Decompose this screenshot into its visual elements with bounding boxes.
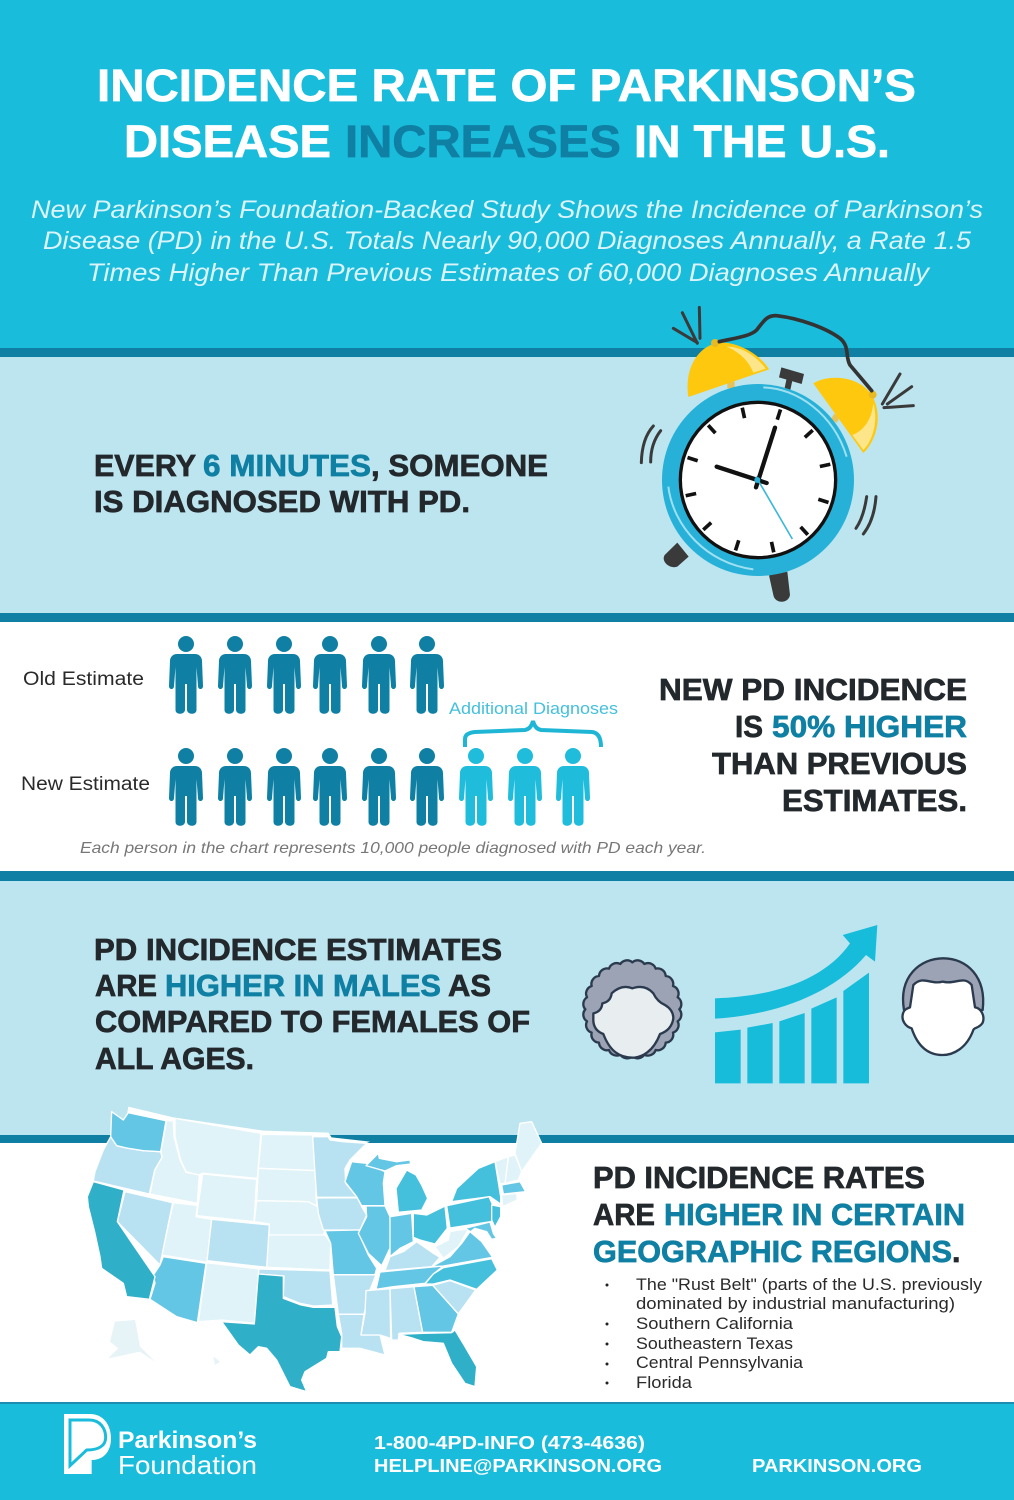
icon: Parkinson's Foundation logo mark — [64, 1414, 111, 1474]
states: light tier — [93, 1137, 476, 1355]
panel: clock section background — [0, 348, 1014, 622]
heading: 50% higher: ESTIMATES. — [782, 784, 967, 818]
panel: header background — [0, 0, 1014, 348]
list: higher-incidence regions — [606, 1276, 983, 1392]
heading: geographic regions: . — [952, 1235, 960, 1269]
states: Alaska and Hawaii — [108, 1320, 220, 1365]
logo wordmark — [118, 1427, 257, 1480]
title: IN THE U.S. — [634, 116, 890, 167]
heading: higher in males: COMPARED TO FEMALES OF — [95, 1005, 530, 1039]
list: higher-incidence regions: Southeastern Texas — [636, 1335, 793, 1353]
subtitle — [31, 196, 983, 287]
title — [97, 60, 916, 167]
list: higher-incidence regions: Florida — [636, 1374, 693, 1392]
heading: every 6 minutes: , SOMEONE — [371, 449, 548, 483]
heading: every 6 minutes: 6 MINUTES — [203, 449, 371, 483]
pictogram: old estimate people — [169, 636, 444, 714]
heading: higher in males: AS — [448, 969, 491, 1003]
chart: rising bars and arrow — [715, 925, 877, 1083]
heading: geographic regions: GEOGRAPHIC REGIONS — [593, 1235, 952, 1269]
footnote: Each person in the chart represents 10,000 people diagnosed with PD each year. — [80, 840, 706, 857]
states: strong tier — [396, 1162, 501, 1289]
heading: every 6 minutes: IS DIAGNOSED WITH PD. — [94, 485, 470, 519]
list: higher-incidence regions: Southern California — [636, 1315, 794, 1333]
states: medium tier — [111, 1112, 526, 1332]
icons: female face, rising chart, male face — [583, 925, 983, 1083]
subtitle: Disease (PD) in the U.S. Totals Nearly 90,000 Diagnoses Annually, a Rate 1.5 — [43, 227, 971, 255]
logo wordmark: Foundation — [118, 1450, 257, 1480]
title: INCREASES — [345, 116, 621, 167]
subtitle: New Parkinson’s Foundation-Backed Study Shows the Incidence of Parkinson’s — [31, 196, 983, 224]
bracket: additional diagnoses — [465, 721, 601, 747]
label: additional diagnoses: Additional Diagnoses — [449, 699, 618, 718]
heading: higher in males: ALL AGES. — [95, 1042, 254, 1076]
list: higher-incidence regions: The "Rust Belt" (parts of the U.S. previously — [636, 1276, 983, 1294]
panel: footer — [0, 1402, 1014, 1500]
website: PARKINSON.ORG — [752, 1455, 922, 1476]
chart: U.S. incidence map — [87, 1107, 542, 1392]
panel: geographic section background — [0, 1143, 1014, 1402]
contact details: 1-800-4PD-INFO (473-4636) — [374, 1432, 645, 1453]
panel: estimate chart section background — [0, 622, 1014, 871]
contact details: HELPLINE@PARKINSON.ORG — [374, 1455, 662, 1476]
heading: higher in males: HIGHER IN MALES — [165, 969, 441, 1003]
heading: 50% higher — [659, 673, 967, 818]
subtitle: Times Higher Than Previous Estimates of 60,000 Diagnoses Annually — [87, 259, 931, 287]
states: lightest tier — [150, 1118, 542, 1323]
icon: ringing alarm clock — [641, 307, 913, 602]
heading: every 6 minutes — [94, 449, 548, 519]
icon: male face — [902, 958, 983, 1055]
row label: old estimate: Old Estimate — [23, 669, 144, 690]
logo wordmark: Parkinson’s — [118, 1427, 257, 1454]
list: higher-incidence regions: dominated by industrial manufacturing) — [636, 1295, 955, 1313]
title: DISEASE — [124, 116, 331, 167]
heading: higher in males: PD INCIDENCE ESTIMATES — [94, 933, 502, 967]
contact details — [374, 1432, 662, 1476]
row label: new estimate: New Estimate — [21, 774, 150, 795]
states: darkest tier — [87, 1182, 477, 1392]
heading: geographic regions: PD INCIDENCE RATES — [593, 1161, 925, 1195]
list: higher-incidence regions: Central Pennsylvania — [636, 1354, 804, 1372]
heading: geographic regions — [593, 1161, 965, 1269]
heading: geographic regions: HIGHER IN CERTAIN — [664, 1198, 965, 1232]
pictogram: new estimate people — [169, 748, 590, 826]
heading: higher in males — [94, 933, 530, 1076]
heading: higher in males: ARE — [95, 969, 157, 1003]
heading: 50% higher: THAN PREVIOUS — [712, 747, 967, 781]
title: INCIDENCE RATE OF PARKINSON’S — [97, 60, 916, 111]
heading: 50% higher: IS — [735, 710, 763, 744]
heading: 50% higher: NEW PD INCIDENCE — [659, 673, 967, 707]
heading: geographic regions: ARE — [593, 1198, 655, 1232]
heading: 50% higher: 50% HIGHER — [772, 710, 967, 744]
panel: males section background — [0, 871, 1014, 1143]
icon: female face — [583, 960, 681, 1058]
heading: every 6 minutes: EVERY — [94, 449, 196, 483]
